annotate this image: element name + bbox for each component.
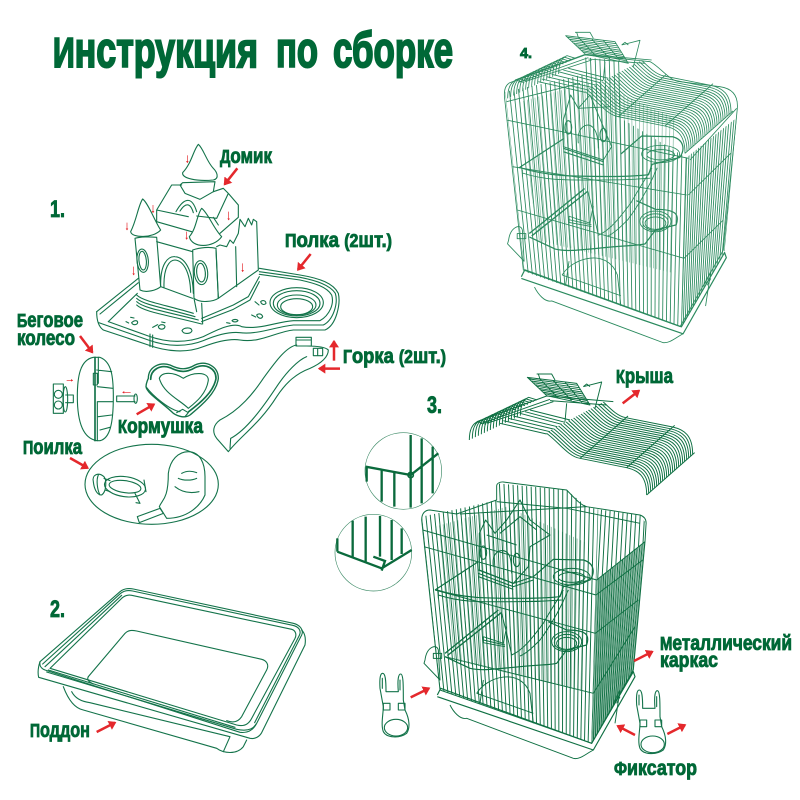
arrow: right fastener to cage: [618, 726, 635, 735]
shelves and base inside cage: [424, 559, 635, 759]
panel: step 3 assembly: [335, 374, 695, 759]
arrow: metal frame: [634, 652, 652, 661]
title: Инструкция: [53, 22, 258, 78]
arrow: feeder: [137, 404, 154, 414]
metal cage frame: [418, 480, 646, 747]
panel: step 2 tray: [38, 589, 305, 752]
detail circle: bottom hook: [335, 514, 412, 591]
step number 3: 3.: [427, 392, 442, 419]
castle house: [131, 144, 258, 324]
arrow: right fastener outward: [667, 725, 685, 734]
detail circle: top hook: [365, 433, 442, 509]
label: fastener: Фиксатор: [614, 757, 697, 780]
step number 2: 2.: [50, 596, 65, 623]
arrow: slide up: [330, 341, 338, 361]
label: metal frame: [660, 632, 792, 672]
label: roof: Крыша: [616, 365, 673, 388]
arrow: roof: [623, 391, 639, 403]
label: shelf: Полка (2шт.): [285, 229, 392, 252]
cage bars, shelves and base: [501, 54, 737, 343]
label: feeder: Кормушка: [118, 415, 203, 438]
castle inside cage: [478, 500, 550, 589]
label: slide: Горка (2шт.): [343, 345, 446, 368]
feeder: [146, 363, 218, 417]
panel: step 1 parts: [53, 144, 340, 524]
label: running wheel: колесо: [17, 327, 75, 350]
step number 4: 4.: [520, 45, 532, 62]
title: по: [276, 22, 318, 78]
arrow: shelf: [298, 254, 311, 270]
small red assembly arrows: [67, 155, 243, 392]
shelf: [97, 268, 339, 351]
arrow: slide left: [319, 365, 340, 372]
fastener right: [636, 690, 666, 754]
panel: step 4 assembled cage: [501, 32, 737, 343]
roof: [469, 374, 695, 495]
title: [53, 22, 453, 78]
arrow: drinker: [70, 458, 88, 468]
water bottle and bracket: [85, 444, 218, 524]
label: drinker: Поилка: [23, 436, 82, 459]
step number 1: 1.: [50, 196, 65, 223]
slide: [214, 337, 328, 452]
fastener left: [380, 673, 409, 737]
label: running wheel: Беговое: [17, 309, 83, 332]
tray drawing: [38, 589, 305, 752]
cage wires and roof: [504, 32, 737, 327]
title: сборке: [333, 22, 453, 78]
arrow: wheel: [80, 336, 92, 352]
label: house: Домик: [220, 145, 272, 168]
arrow: house: [225, 168, 237, 184]
running wheel: [53, 357, 137, 441]
label: running wheel: [17, 309, 83, 350]
arrow: left fastener: [411, 688, 429, 697]
castle in cage: [563, 95, 612, 165]
label: tray: Поддон: [30, 719, 90, 742]
arrow: tray: [97, 723, 115, 732]
label: metal frame: каркас: [660, 649, 718, 672]
